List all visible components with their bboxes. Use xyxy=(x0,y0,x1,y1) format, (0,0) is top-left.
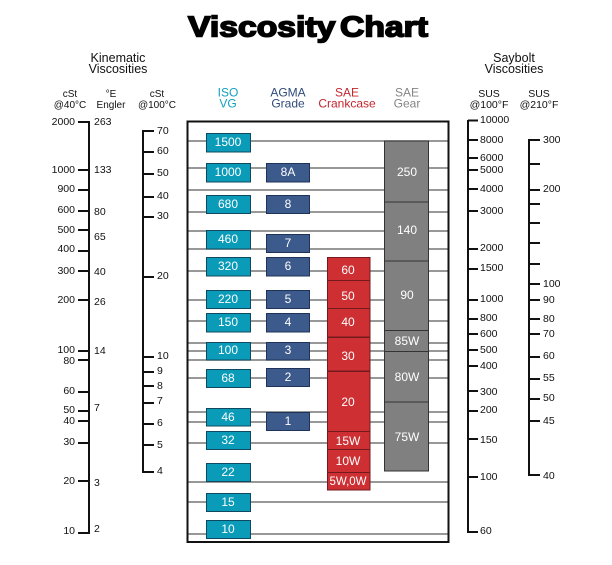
scale: SUS at 100F: 3000 xyxy=(480,205,504,217)
scale: SUS at 210F: 50 xyxy=(543,392,555,404)
scale: SUS at 100F: 800 xyxy=(480,312,498,324)
column: AGMA grades: 7 xyxy=(285,236,292,250)
column: SAE gear grades: 250 xyxy=(397,165,417,179)
column: AGMA grades: 5 xyxy=(285,292,292,306)
heading: cSt at 100C: cSt xyxy=(150,89,164,100)
scale: cSt at 100C: 40 xyxy=(157,190,169,202)
column: ISO VG grades: 15 xyxy=(221,495,235,509)
column: ISO VG grades: 150 xyxy=(218,315,238,329)
scale: cSt at 40C and Engler: 80 xyxy=(94,206,106,218)
column: SAE gear grades: 75W xyxy=(395,430,420,444)
heading: SUS at 100F: @100°F xyxy=(470,99,508,111)
scale: SUS at 100F: 8000 xyxy=(480,134,504,146)
column: ISO VG grades: 460 xyxy=(218,232,238,246)
scale: cSt at 40C and Engler: 20 xyxy=(63,475,75,487)
scale: SUS at 210F: 200 xyxy=(543,183,561,195)
scale: cSt at 40C and Engler: 900 xyxy=(57,183,75,195)
column: SAE gear grades: 140 xyxy=(397,223,417,237)
scale: cSt at 40C and Engler: 1000 xyxy=(52,164,75,176)
heading: cSt at 40C: cSt xyxy=(63,89,77,100)
heading: SAE Crankcase xyxy=(318,86,376,110)
heading: SAE Gear: SAE xyxy=(395,86,419,100)
scale: cSt at 40C and Engler: 100 xyxy=(57,344,75,356)
scale: SUS at 100F: 500 xyxy=(480,344,498,356)
column: SAE crankcase grades xyxy=(328,258,370,490)
heading: cSt at 100C xyxy=(138,89,176,111)
scale: cSt at 100C: 8 xyxy=(157,380,163,392)
scale: cSt at 100C: 10 xyxy=(157,350,169,362)
scale: cSt at 40C and Engler: 500 xyxy=(57,224,75,236)
scale: cSt at 40C and Engler: 65 xyxy=(94,231,106,243)
column: SAE crankcase grades: 10W xyxy=(336,454,361,468)
column: AGMA grades: 6 xyxy=(285,259,292,273)
panel: main chart frame xyxy=(188,122,448,542)
scale: SUS at 100F: 100 xyxy=(480,471,498,483)
scale: cSt at 100C: 5 xyxy=(157,439,163,451)
column: SAE crankcase grades: 40 xyxy=(341,315,355,329)
heading: AGMA Grade: Grade xyxy=(271,96,305,110)
column: AGMA grades: 8 xyxy=(285,197,292,211)
scale: SUS at 210F: 90 xyxy=(543,294,555,306)
scale: SUS at 100F: 150 xyxy=(480,434,498,446)
column: SAE crankcase grades: 5W,0W xyxy=(329,476,367,488)
scale: SUS at 100F xyxy=(468,114,509,537)
scale: cSt at 100C: 60 xyxy=(157,145,169,157)
heading: kinematic viscosities xyxy=(89,51,147,76)
scale: cSt at 40C and Engler xyxy=(52,116,112,537)
scale: SUS at 100F: 600 xyxy=(480,328,498,340)
column: AGMA grades: 8A xyxy=(281,165,295,179)
column: SAE gear grades: 90 xyxy=(400,288,414,302)
heading: SUS at 100F xyxy=(470,88,508,111)
scale: SUS at 100F: 1000 xyxy=(480,293,504,305)
heading: SUS at 100F: SUS xyxy=(478,88,500,100)
heading: AGMA Grade: AGMA xyxy=(270,86,306,100)
scale: SUS at 100F: 1500 xyxy=(480,262,504,274)
column: ISO VG grades: 220 xyxy=(218,292,238,306)
scale: SUS at 100F: 2000 xyxy=(480,242,504,254)
heading: SAE Gear: Gear xyxy=(394,96,420,110)
scale: cSt at 40C and Engler: 60 xyxy=(63,385,75,397)
scale: SUS at 100F: 4000 xyxy=(480,183,504,195)
column: AGMA grades: 4 xyxy=(285,315,292,329)
column: ISO VG grades: 1000 xyxy=(215,165,242,179)
scale: cSt at 40C and Engler: 14 xyxy=(94,345,106,357)
scale: cSt at 100C: 30 xyxy=(157,210,169,222)
column: AGMA grades xyxy=(266,164,310,430)
column: SAE gear grades: 85W xyxy=(395,334,420,348)
scale: SUS at 210F: 45 xyxy=(543,415,555,427)
column: SAE gear grades xyxy=(384,141,428,471)
heading: degrees Engler: °E xyxy=(106,89,117,100)
scale: cSt at 40C and Engler: 400 xyxy=(57,243,75,255)
column: SAE crankcase grades: 60 xyxy=(341,263,355,277)
scale: cSt at 40C and Engler: 2 xyxy=(94,523,100,535)
scale: SUS at 210F: 70 xyxy=(543,328,555,340)
heading: cSt at 40C: @40°C xyxy=(54,100,86,111)
column: ISO VG grades: 1500 xyxy=(215,135,242,149)
scale: cSt at 100C: 9 xyxy=(157,365,163,377)
column: ISO VG grades: 320 xyxy=(218,259,238,273)
column: ISO VG grades: 46 xyxy=(221,410,235,424)
scale: SUS at 100F: 6000 xyxy=(480,152,504,164)
scale: cSt at 40C and Engler: 30 xyxy=(63,436,75,448)
scale: SUS at 210F xyxy=(529,134,561,482)
heading: degrees Engler: Engler xyxy=(97,100,126,111)
scale: SUS at 210F: 300 xyxy=(543,134,561,146)
scale: SUS at 100F: 200 xyxy=(480,404,498,416)
scale: cSt at 100C: 7 xyxy=(157,395,163,407)
scale: SUS at 100F: 5000 xyxy=(480,164,504,176)
heading: SAE Gear xyxy=(394,86,420,110)
column: SAE crankcase grades: 50 xyxy=(341,289,355,303)
column: AGMA grades: 1 xyxy=(285,414,292,428)
column: SAE gear grades: 80W xyxy=(395,370,420,384)
heading: AGMA Grade xyxy=(270,86,306,110)
heading: ISO VG: VG xyxy=(219,96,237,110)
scale: cSt at 40C and Engler: 40 xyxy=(94,266,106,278)
column: ISO VG grades: 680 xyxy=(218,197,238,211)
scale: cSt at 40C and Engler: 200 xyxy=(57,294,75,306)
scale: cSt at 100C: 70 xyxy=(157,125,169,137)
scale: SUS at 210F: 40 xyxy=(543,470,555,482)
scale: cSt at 100C xyxy=(143,125,169,477)
column: ISO VG grades: 10 xyxy=(221,522,235,536)
heading: ISO VG: ISO xyxy=(218,86,238,100)
scale: cSt at 40C and Engler: 263 xyxy=(94,116,112,128)
scale: cSt at 40C and Engler: 2000 xyxy=(52,116,75,128)
column: ISO VG grades: 22 xyxy=(221,465,235,479)
heading: SUS at 210F: @210°F xyxy=(520,99,558,111)
heading: Saybolt viscosities xyxy=(485,51,543,76)
heading: SUS at 210F: SUS xyxy=(528,88,550,100)
column: ISO VG grades: 100 xyxy=(218,343,238,357)
scale: SUS at 100F: 10000 xyxy=(480,114,509,126)
column: ISO VG grades: 32 xyxy=(221,433,235,447)
scale: SUS at 210F: 55 xyxy=(543,372,555,384)
column: AGMA grades: 2 xyxy=(285,370,292,384)
scale: SUS at 210F: 60 xyxy=(543,350,555,362)
heading: ISO VG xyxy=(218,86,238,110)
scale: cSt at 40C and Engler: 600 xyxy=(57,204,75,216)
scale: cSt at 40C and Engler: 3 xyxy=(94,477,100,489)
scale: SUS at 210F: 100 xyxy=(543,278,561,290)
scale: cSt at 40C and Engler: 133 xyxy=(94,164,112,176)
scale: cSt at 100C: 20 xyxy=(157,270,169,282)
heading: Saybolt viscosities: Saybolt xyxy=(493,51,535,65)
scale: cSt at 40C and Engler: 10 xyxy=(63,525,75,537)
scale: cSt at 40C and Engler: 26 xyxy=(94,296,106,308)
column: ISO VG grades: 68 xyxy=(221,371,235,385)
column: SAE crankcase grades: 30 xyxy=(341,349,355,363)
scale: cSt at 40C and Engler: 7 xyxy=(94,402,100,414)
scale: SUS at 100F: 60 xyxy=(480,525,492,537)
scale: cSt at 40C and Engler: 80 xyxy=(63,355,75,367)
heading: degrees Engler xyxy=(97,89,126,111)
column: ISO VG grades xyxy=(206,134,250,538)
column: SAE crankcase grades: 15W xyxy=(336,434,361,448)
scale: SUS at 100F: 400 xyxy=(480,360,498,372)
title: Viscosity Chart xyxy=(188,12,429,44)
column: AGMA grades: 3 xyxy=(285,343,292,357)
heading: SUS at 210F xyxy=(520,88,558,111)
scale: cSt at 100C: 6 xyxy=(157,417,163,429)
scale: cSt at 40C and Engler: 300 xyxy=(57,265,75,277)
scale: SUS at 210F: 80 xyxy=(543,313,555,325)
scale: cSt at 40C and Engler: 40 xyxy=(63,415,75,427)
heading: cSt at 100C: @100°C xyxy=(138,100,176,111)
column: SAE crankcase grades: 20 xyxy=(341,395,355,409)
scale: cSt at 40C and Engler: 50 xyxy=(63,404,75,416)
scale: cSt at 100C: 50 xyxy=(157,167,169,179)
scale: cSt at 100C: 4 xyxy=(157,465,163,477)
scale: SUS at 100F: 300 xyxy=(480,386,498,398)
heading: cSt at 40C xyxy=(54,89,86,111)
heading: SAE Crankcase: SAE xyxy=(335,86,359,100)
heading: kinematic viscosities: Viscosities xyxy=(89,62,147,76)
heading: kinematic viscosities: Kinematic xyxy=(91,51,145,65)
heading: Saybolt viscosities: Viscosities xyxy=(485,62,543,76)
heading: SAE Crankcase: Crankcase xyxy=(318,96,376,110)
